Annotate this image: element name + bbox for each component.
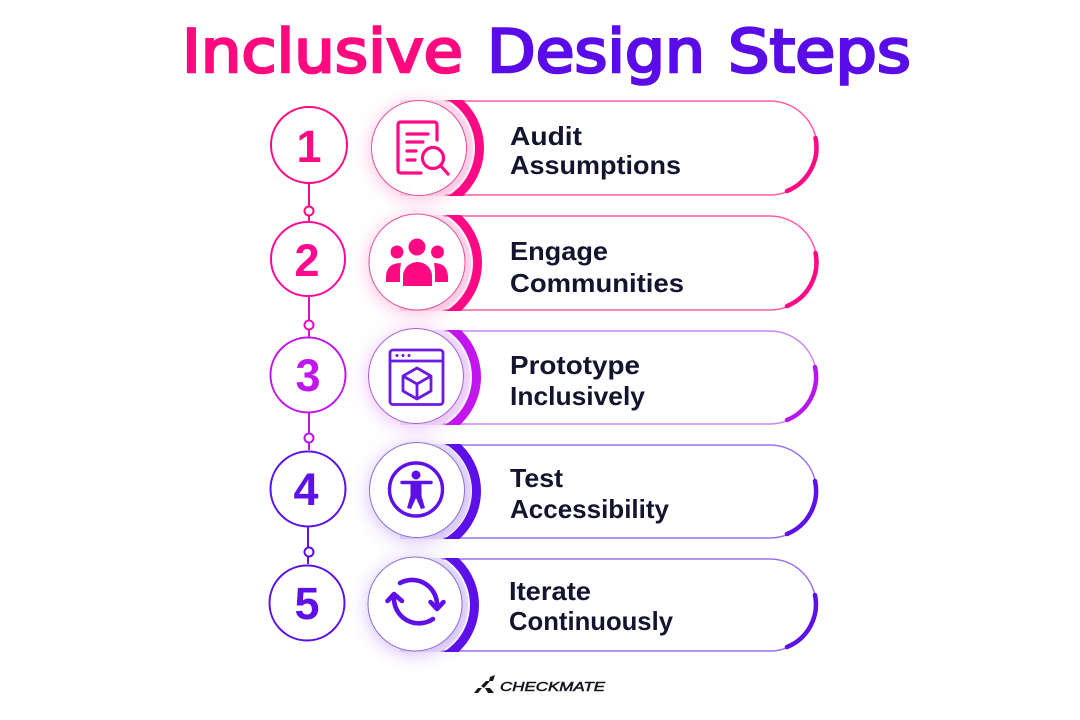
icon disc 3: [368, 328, 464, 424]
icon disc 2: [369, 214, 465, 310]
step 3: [270, 316, 816, 438]
icon: window with cube: [390, 350, 443, 404]
step 2: [271, 202, 817, 324]
title: Inclusive: [182, 17, 463, 87]
number badge 4: [270, 452, 346, 526]
pill card 1: [400, 100, 819, 196]
label 5: Continuously: [509, 606, 674, 636]
step 1: [271, 88, 817, 208]
number badge 2: [271, 222, 345, 296]
pill card 5: [400, 558, 818, 652]
number badge 3: [270, 338, 346, 412]
icon: logo mark: [474, 675, 495, 693]
connector: 2 to 3: [304, 296, 314, 337]
icon: accessibility figure: [390, 463, 442, 516]
label 4: Test: [510, 463, 563, 493]
step 4: [270, 432, 816, 550]
title: [182, 17, 911, 87]
label 4: [510, 463, 670, 524]
title: Design: [487, 17, 705, 87]
connector: 4 to 5: [304, 526, 314, 564]
icon disc 5: [368, 557, 462, 651]
step 5: [270, 546, 816, 664]
icon disc 1: [372, 100, 466, 196]
number badge 5: [270, 566, 344, 640]
connector: 1 to 2: [304, 183, 314, 222]
connector: 3 to 4: [304, 412, 314, 450]
label 3: Inclusively: [510, 381, 646, 411]
label 4: Accessibility: [510, 494, 670, 524]
logo: [474, 675, 605, 694]
number badge 5: 5: [294, 578, 320, 629]
label 2: Engage: [510, 236, 608, 266]
number badge 4: 4: [293, 464, 319, 515]
label 3: [510, 350, 646, 411]
icon: people group: [386, 238, 448, 286]
icon disc 4: [370, 442, 464, 538]
label 5: Iterate: [509, 576, 591, 606]
number badge 1: [271, 107, 347, 183]
label 1: Assumptions: [510, 150, 681, 180]
pill card 4: [400, 444, 818, 539]
label 2: [510, 236, 684, 298]
title: Steps: [728, 17, 911, 87]
number badge 2: 2: [294, 235, 320, 286]
number badge 3: 3: [295, 350, 321, 401]
label 5: [509, 576, 674, 636]
label 2: Communities: [510, 268, 684, 298]
number badge 1: 1: [296, 121, 322, 172]
pill card 2: [400, 215, 819, 311]
label 1: Audit: [510, 121, 582, 151]
icon: refresh cycle: [388, 580, 444, 623]
label 1: [510, 121, 681, 180]
pill card 3: [400, 330, 818, 425]
icon: document search: [398, 122, 448, 174]
label 3: Prototype: [510, 350, 640, 380]
logo wordmark: CHECKMATE: [500, 679, 605, 694]
